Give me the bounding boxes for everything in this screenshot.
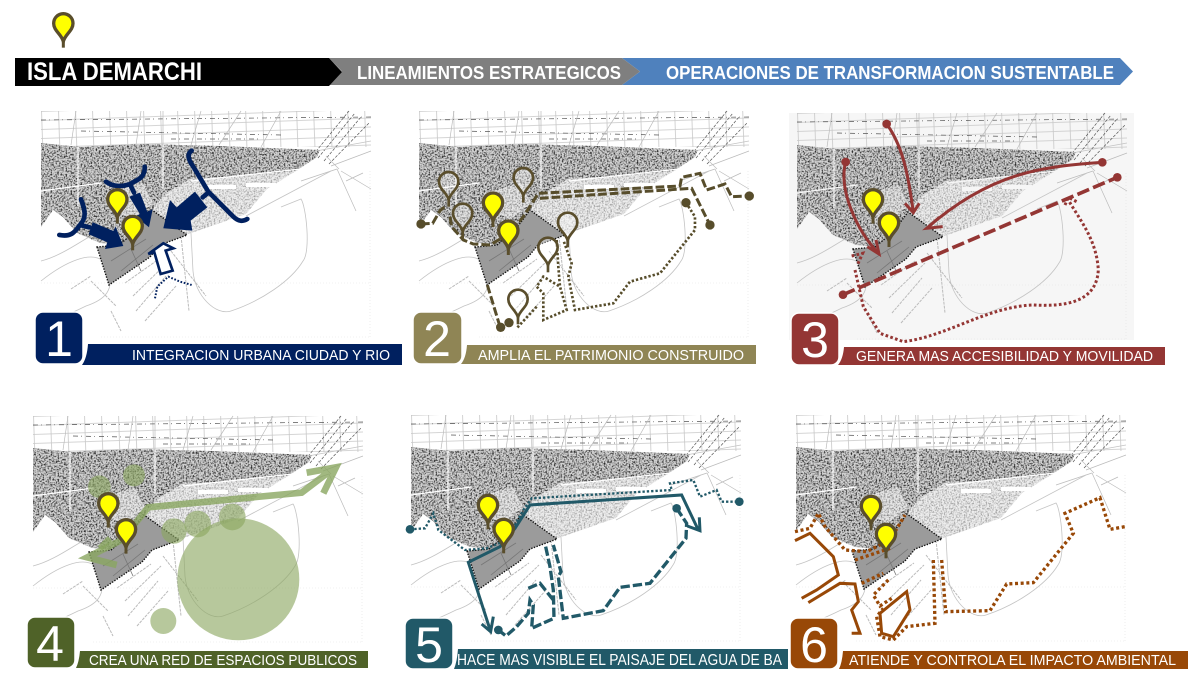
badge 5: 5 <box>415 617 443 673</box>
header: grey segment <box>329 58 640 85</box>
base map 2 <box>419 111 749 337</box>
header: blue segment <box>622 58 1133 85</box>
panel 2: patrimonio <box>413 111 756 367</box>
routes 5 <box>406 480 744 636</box>
map background 3 <box>789 113 1134 340</box>
header: grey segment: LINEAMIENTOS ESTRATEGICOS <box>357 62 621 83</box>
icon: legend pin <box>54 14 73 48</box>
badge 1: 1 <box>45 311 73 367</box>
base map 3 <box>797 113 1127 339</box>
panel 3: accesibilidad <box>789 113 1165 368</box>
header: blue segment: OPERACIONES DE TRANSFORMACION SUSTENTABLE <box>666 62 1114 83</box>
header: title <box>15 58 342 86</box>
badge 3 <box>791 312 839 368</box>
label 5: HACE MAS VISIBLE EL PAISAJE DEL AGUA DE BA <box>457 652 783 669</box>
label 2: AMPLIA EL PATRIMONIO CONSTRUIDO <box>478 348 744 364</box>
label 4: CREA UNA RED DE ESPACIOS PUBLICOS <box>89 653 357 669</box>
pins 4 <box>99 494 136 554</box>
label 3: GENERA MAS ACCESIBILIDAD Y MOVILIDAD <box>856 349 1153 365</box>
badge 6 <box>790 617 838 673</box>
header: title: ISLA DEMARCHI <box>27 58 202 86</box>
badge 4: 4 <box>36 616 64 672</box>
base map 6 <box>796 415 1126 641</box>
panel 1: integracion urbana <box>35 111 402 367</box>
badge 6: 6 <box>800 617 828 673</box>
arrows and branches 1 <box>59 151 247 298</box>
label 6: ATIENDE Y CONTROLA EL IMPACTO AMBIENTAL <box>849 653 1176 669</box>
routes 2 <box>416 173 754 332</box>
pins 5 <box>478 495 513 553</box>
green spaces 4 <box>87 464 336 640</box>
base map 1 <box>41 111 371 337</box>
routes 3 <box>839 120 1122 342</box>
label 1: INTEGRACION URBANA CIUDAD Y RIO <box>132 348 390 364</box>
badge 5 <box>405 617 453 673</box>
routes 6 <box>795 498 1125 640</box>
badge 3: 3 <box>801 312 829 368</box>
badge 4 <box>27 616 75 672</box>
heritage pins 2 <box>439 168 577 324</box>
panel 5: paisaje del agua <box>405 415 788 673</box>
pins 6 <box>861 496 896 558</box>
panel 4: espacios publicos <box>27 416 368 672</box>
base map 5 <box>411 415 741 641</box>
badge 1 <box>35 311 83 367</box>
pins 3 <box>863 190 899 247</box>
header ribbon <box>15 58 1133 86</box>
pins 1 <box>108 190 142 250</box>
label 1 <box>82 344 402 365</box>
base map 4 <box>33 416 363 642</box>
badge 2 <box>413 311 462 367</box>
panel 6: impacto ambiental <box>790 415 1188 673</box>
badge 2: 2 <box>423 311 451 367</box>
